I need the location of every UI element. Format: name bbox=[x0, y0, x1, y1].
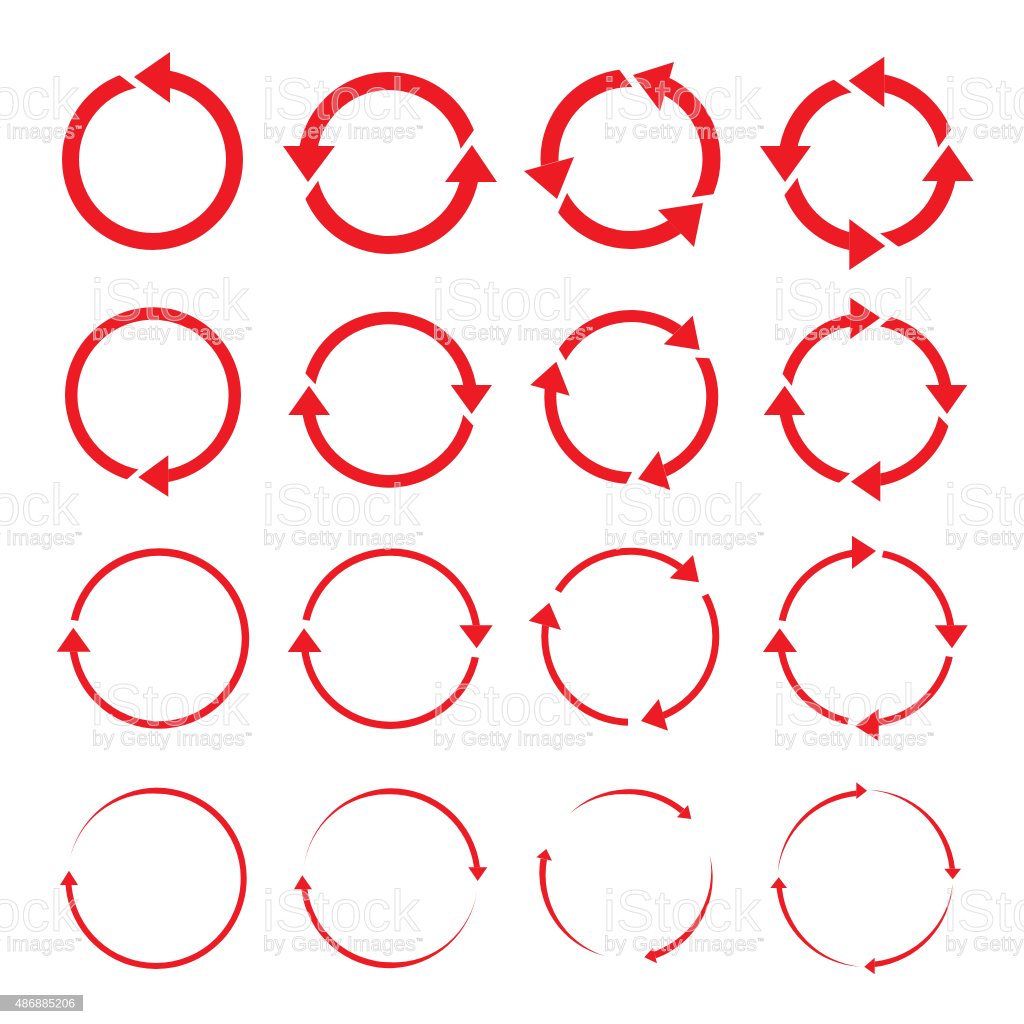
arrowhead: right bbox=[935, 625, 968, 648]
watermark: repeated iStock by Getty Images text: iStock bbox=[91, 268, 250, 333]
arrowhead: left bbox=[764, 386, 805, 415]
row 2 icon 1: medium circle with one arrow bbox=[71, 314, 235, 505]
watermark: repeated iStock by Getty Images text: iStock bbox=[91, 673, 250, 738]
arrow: top bbox=[569, 789, 691, 819]
arrowhead: bottom bbox=[849, 219, 885, 270]
watermark: repeated iStock by Getty Images text: ™ bbox=[586, 327, 593, 334]
watermark: repeated iStock by Getty Images text: by Getty Images bbox=[263, 933, 416, 956]
watermark: repeated iStock by Getty Images text: iStock bbox=[773, 268, 932, 333]
arrowhead: bottom bbox=[641, 699, 668, 731]
watermark: repeated iStock by Getty Images text: ™ bbox=[927, 732, 934, 740]
watermark: repeated iStock by Getty Images text: iStock bbox=[603, 879, 762, 944]
arrow: right bbox=[644, 855, 713, 963]
watermark: repeated iStock by Getty Images text: by Getty Images bbox=[263, 527, 416, 550]
arrowhead: left bbox=[530, 362, 570, 396]
arrowhead: bottom bbox=[658, 203, 703, 247]
arrowhead: right bbox=[445, 145, 497, 182]
watermark: repeated iStock by Getty Images text: iStock bbox=[432, 673, 591, 738]
watermark: repeated iStock by Getty Images text: iStock bbox=[432, 268, 591, 333]
watermark: repeated iStock by Getty Images text: by Getty Images bbox=[774, 728, 927, 750]
watermark: repeated iStock by Getty Images text: ™ bbox=[245, 327, 252, 334]
row 2 icon 3: medium circle with three arrows bbox=[520, 303, 724, 505]
arrowhead: bottom bbox=[851, 461, 880, 502]
row 2 icon 4: medium circle with four arrows bbox=[755, 290, 975, 505]
arrowhead: top bbox=[852, 536, 876, 569]
watermark: repeated iStock by Getty Images text: by Getty Images bbox=[263, 120, 416, 144]
row 1 icon 2: thick circle with two arrows bbox=[270, 81, 510, 245]
arrowhead bbox=[134, 52, 170, 103]
arrowhead: left bbox=[529, 603, 561, 630]
stock image number badge bbox=[0, 995, 83, 1011]
arrowhead: left bbox=[524, 157, 574, 199]
arrowhead: left bbox=[288, 386, 330, 415]
arrowhead: right bbox=[451, 385, 492, 414]
watermark: repeated iStock by Getty Images text: iStock bbox=[262, 473, 421, 538]
watermark: repeated iStock by Getty Images text: iStock bbox=[262, 879, 421, 944]
arrowhead: top bbox=[633, 62, 674, 111]
arrow: top right bbox=[869, 790, 961, 879]
watermark: repeated iStock by Getty Images text: ™ bbox=[75, 532, 82, 539]
arrowhead: left bbox=[763, 628, 797, 652]
row 1 icon 3: thick circle with three arrows bbox=[505, 41, 736, 265]
stock image number badge: 486885206 bbox=[15, 996, 75, 1010]
row 1 icon 4: thick circle with four arrows bbox=[750, 45, 985, 280]
watermark: repeated iStock by Getty Images text: ™ bbox=[75, 938, 82, 945]
arrowhead: top bbox=[850, 298, 880, 339]
row 1 icon 1: thick circle with one arrow bbox=[70, 50, 234, 242]
watermark: repeated iStock by Getty Images text: ™ bbox=[416, 126, 423, 132]
arrowhead: left bbox=[288, 628, 322, 652]
watermark: repeated iStock by Getty Images text: by Getty Images bbox=[433, 322, 586, 345]
watermark: repeated iStock by Getty Images text: ™ bbox=[416, 938, 423, 945]
watermark: repeated iStock by Getty Images text: ™ bbox=[75, 126, 82, 132]
watermark: repeated iStock by Getty Images text: ™ bbox=[757, 126, 764, 132]
watermark: repeated iStock by Getty Images text: ™ bbox=[927, 327, 934, 334]
watermark: repeated iStock by Getty Images text: ™ bbox=[757, 938, 764, 945]
row 3 icon 1: thin circle with one arrow bbox=[55, 552, 245, 725]
watermark: repeated iStock by Getty Images text: by Getty Images bbox=[92, 322, 245, 345]
arrowhead bbox=[60, 871, 78, 885]
watermark: repeated iStock by Getty Images text: by Getty Images bbox=[433, 728, 586, 750]
row 2 icon 2: medium circle with two arrows bbox=[280, 318, 500, 481]
arrowhead: right bbox=[922, 145, 974, 181]
arrowhead: top bbox=[670, 555, 699, 582]
arrowhead: right bbox=[459, 625, 493, 648]
row 3 icon 3: thin circle with three arrows bbox=[515, 543, 725, 742]
arrowhead: top bbox=[664, 316, 700, 350]
watermark: repeated iStock by Getty Images text: ™ bbox=[245, 732, 252, 740]
arrow: left bbox=[536, 849, 605, 956]
arrow: top left bbox=[778, 782, 867, 873]
arrow: bottom right bbox=[864, 883, 953, 974]
watermark: repeated iStock by Getty Images text: iStock bbox=[262, 67, 421, 132]
watermark: repeated iStock by Getty Images text: by Getty Images bbox=[92, 728, 245, 750]
arrowhead: bottom bbox=[638, 451, 670, 490]
watermark: repeated iStock by Getty Images text: iStock bbox=[603, 67, 762, 132]
watermark: repeated iStock by Getty Images text: ™ bbox=[416, 532, 423, 539]
watermark: repeated iStock by Getty Images text: ™ bbox=[586, 732, 593, 740]
arrow: bottom bbox=[294, 875, 477, 968]
row 4 icon 4: tapered circle with four arrows bbox=[770, 782, 961, 974]
row 4 icon 3: tapered circle with three arrows bbox=[536, 789, 713, 963]
arrowhead: left bbox=[283, 146, 335, 182]
watermark: repeated iStock by Getty Images text: ™ bbox=[757, 532, 764, 539]
arrowhead bbox=[138, 455, 168, 497]
watermark: repeated iStock by Getty Images text: iStock bbox=[773, 673, 932, 738]
arrowhead: right bbox=[925, 385, 967, 414]
row 3 icon 2: thin circle with two arrows bbox=[285, 552, 495, 725]
row 4 icon 2: tapered circle with two arrows bbox=[294, 788, 487, 968]
arrow: bottom left bbox=[770, 877, 860, 967]
watermark: repeated iStock by Getty Images text: by Getty Images bbox=[604, 120, 757, 144]
watermark: repeated iStock by Getty Images text: iStock bbox=[603, 473, 762, 538]
arrowhead: bottom bbox=[855, 709, 879, 741]
watermark: repeated iStock by Getty Images text: by Getty Images bbox=[604, 933, 757, 956]
arrowhead bbox=[57, 628, 91, 652]
row 4 icon 1: tapered circle with one arrow bbox=[60, 788, 247, 969]
arrowhead: left bbox=[760, 146, 811, 182]
watermark: repeated iStock by Getty Images text: by Getty Images bbox=[774, 322, 927, 345]
arrowhead: top bbox=[849, 57, 884, 107]
watermark: repeated iStock by Getty Images text: by Getty Images bbox=[604, 527, 757, 550]
arrow: top bbox=[304, 788, 487, 881]
row 3 icon 4: thin circle with four arrows bbox=[760, 530, 972, 745]
